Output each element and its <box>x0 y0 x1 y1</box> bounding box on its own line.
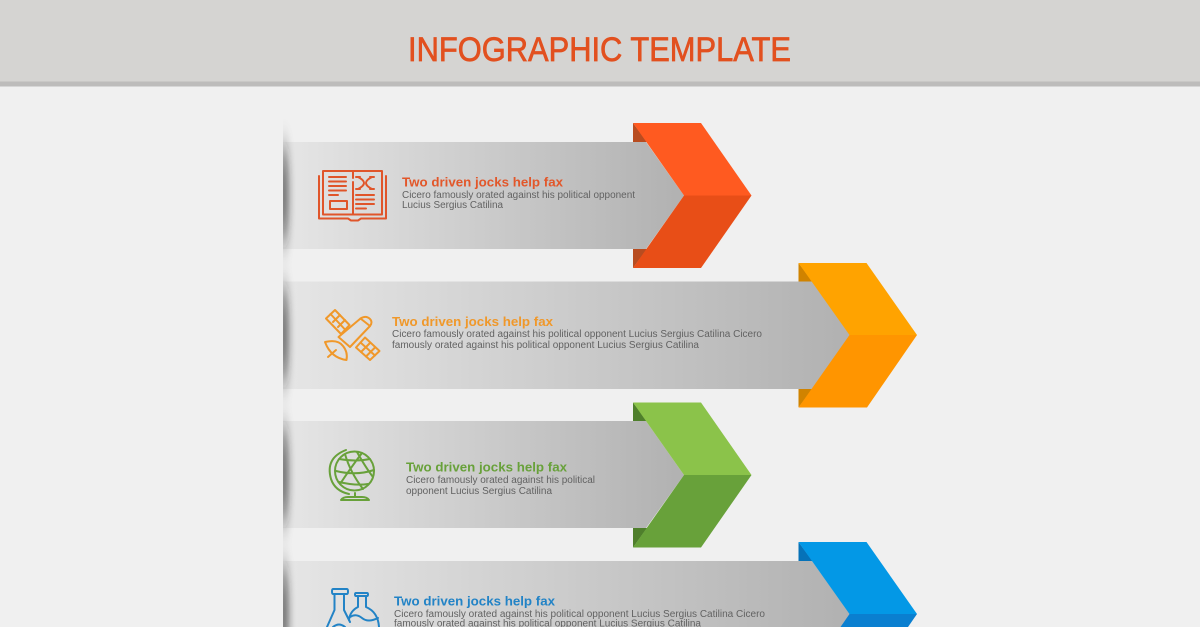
arrow 3 body: Cicero famously orated against his political <box>406 475 595 486</box>
arrow 3 body: opponent Lucius Sergius Catilina <box>406 486 553 497</box>
left edge shadows <box>280 145 288 627</box>
panel: arrow 2 <box>283 263 917 408</box>
arrow 1 fold shadows <box>633 123 647 268</box>
arrow 1 band <box>283 142 684 249</box>
arrow 2 body: famously orated against his political opponent Lucius Sergius Catilina <box>392 340 700 351</box>
arrow 4 band <box>283 561 850 627</box>
arrow 1 heading: Two driven jocks help fax <box>402 176 563 190</box>
icon: open book <box>319 171 386 220</box>
arrow 3 chevron <box>633 402 752 548</box>
icon: satellite <box>325 310 380 360</box>
arrow 4 heading: Two driven jocks help fax <box>394 594 555 608</box>
panel: arrow 1 <box>283 123 752 268</box>
title: INFOGRAPHIC TEMPLATE <box>408 31 791 69</box>
arrow 1 body: Lucius Sergius Catilina <box>402 200 504 211</box>
arrow 2 chevron <box>798 263 917 408</box>
arrow 2 heading: Two driven jocks help fax <box>392 315 553 329</box>
panel: arrow 4 <box>283 542 917 627</box>
arrow 2 band <box>283 282 850 389</box>
arrow 2 body <box>392 329 762 351</box>
arrow 4 body: Cicero famously orated against his political opponent Lucius Sergius Catilina Cicero <box>394 609 765 620</box>
panel: arrow 3 <box>283 402 752 548</box>
arrow 3 heading: Two driven jocks help fax <box>406 460 567 474</box>
arrow 3 fold shadows <box>633 402 647 548</box>
arrow 1 body: Cicero famously orated against his political opponent <box>402 190 635 201</box>
arrow 3 body <box>406 475 595 497</box>
arrow 1 chevron <box>633 123 752 268</box>
arrow 4 chevron <box>798 542 917 627</box>
icon: flasks <box>327 589 379 627</box>
icon: globe <box>330 450 374 500</box>
arrow 4 body <box>394 609 765 627</box>
arrow 3 band <box>283 421 684 528</box>
header band <box>0 0 1200 86</box>
arrow 1 body <box>402 190 635 211</box>
arrow 4 fold shadow <box>798 542 812 561</box>
arrow 2 fold shadows <box>798 263 812 408</box>
arrow 2 body: Cicero famously orated against his political opponent Lucius Sergius Catilina Cicero <box>392 329 762 340</box>
